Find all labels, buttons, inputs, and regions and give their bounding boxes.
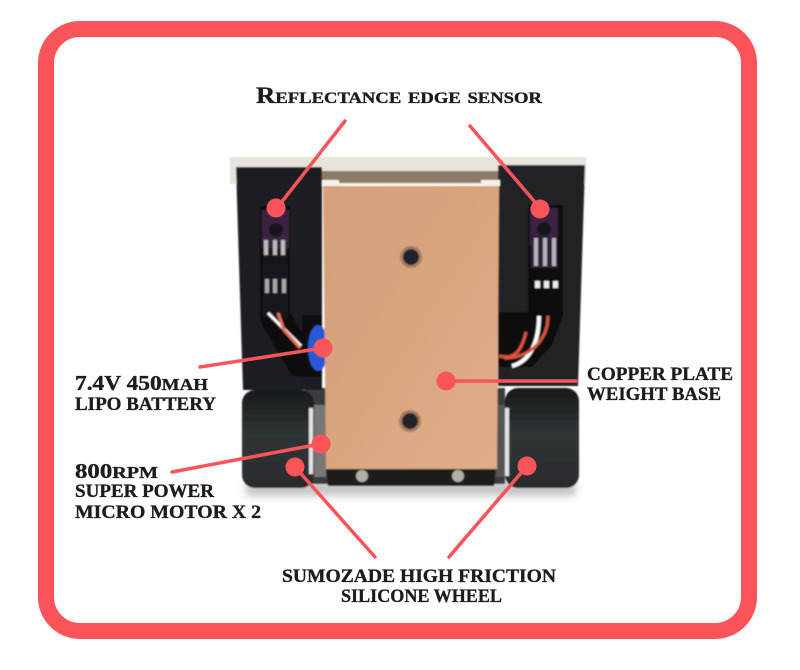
label: motor: 800 RPM [75, 459, 158, 483]
robot photo illustration [230, 157, 586, 496]
label: wheel [282, 566, 556, 607]
left sensor recess [260, 206, 322, 376]
left wheel [242, 390, 314, 488]
label: copper plate: COPPER PLATE [587, 364, 733, 385]
left wires [268, 313, 301, 346]
copper plate [323, 186, 499, 469]
label: motor: SUPER POWER [75, 481, 214, 502]
label: wheel: SUMOZADE HIGH FRICTION [282, 566, 556, 587]
label: battery: LIPO BATTERY [75, 394, 216, 415]
label: motor [75, 459, 261, 523]
callout: motor [172, 434, 330, 472]
left black block [236, 167, 322, 390]
right wires [512, 316, 539, 366]
bottom screw [399, 410, 421, 432]
right wheel [505, 388, 579, 488]
label: reflectance edge sensor: Reflectance edge sensor [256, 83, 543, 108]
top beige plate [230, 157, 586, 184]
axle gap [305, 388, 505, 484]
bottom black base [326, 469, 496, 486]
right sensor recess [498, 205, 563, 367]
label: battery: 7.4V 450 MAH [75, 371, 208, 395]
right black block [498, 165, 585, 386]
callout: left sensor [266, 121, 345, 218]
label: motor: MICRO MOTOR X 2 [75, 502, 261, 523]
label: battery [75, 371, 216, 415]
frame: rounded red border [46, 29, 749, 631]
callout: battery [200, 338, 332, 367]
top screw [400, 246, 422, 268]
callout: copper plate [436, 372, 576, 390]
right connector pins [535, 281, 540, 288]
wheel shadow [246, 482, 576, 496]
callout: right wheel [449, 456, 536, 557]
blue battery [308, 325, 328, 371]
label: copper plate [587, 364, 733, 405]
label: wheel: SILICONE WHEEL [341, 586, 502, 607]
callout: left wheel [286, 458, 375, 557]
left purple sensor board [262, 210, 289, 248]
label: copper plate: WEIGHT BASE [587, 384, 721, 405]
callout lines and dots [172, 121, 576, 557]
left connector pins [265, 279, 269, 293]
callout: right sensor [470, 126, 550, 218]
right purple sensor board [530, 208, 558, 246]
